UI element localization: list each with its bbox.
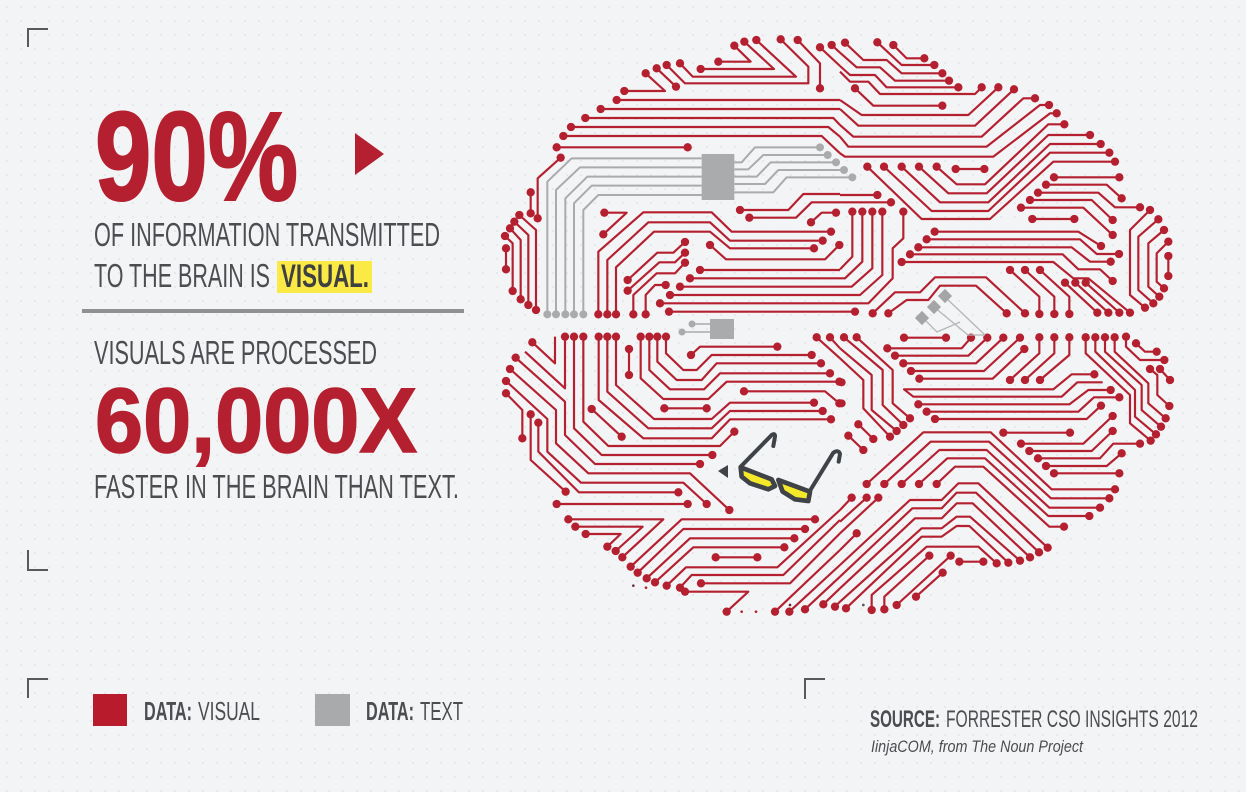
corner bracket: bottom left	[28, 550, 48, 570]
brain: small gray chip, centre	[678, 319, 734, 339]
legend: data visual	[93, 694, 260, 726]
brain: lower right traces	[838, 337, 1170, 610]
text: visuals are processed: VISUALS ARE PROCESSED	[94, 334, 377, 371]
text: faster in the brain: FASTER IN THE BRAIN THAN TEXT.	[94, 468, 459, 505]
icon: red arrow	[355, 133, 384, 175]
divider	[82, 309, 464, 313]
icon: glasses pointer triangle	[718, 465, 728, 478]
legend: data visual: VISUAL	[198, 696, 260, 726]
brain: upper right traces	[840, 42, 1168, 314]
legend: data text: TEXT	[420, 696, 463, 726]
headline stat: 60,000X: 60,000X	[95, 370, 417, 472]
brain: gray text-data chip, upper left	[547, 147, 852, 314]
corner bracket: top left	[28, 29, 48, 47]
source line: SOURCE:	[870, 706, 940, 733]
legend: data text	[315, 694, 463, 726]
icon: glasses	[741, 434, 840, 501]
brain: upper left traces	[505, 39, 840, 314]
image credit: IinjaCOM, from The Noun Project	[871, 737, 1084, 756]
headline stat: 90%: 90%	[95, 86, 298, 227]
source line	[870, 706, 1198, 733]
legend: data visual: DATA:	[144, 696, 192, 726]
text: information transmitted line 1: OF INFORMATION TRANSMITTED	[94, 216, 440, 253]
text: information transmitted line 2: TO THE BRAIN IS	[94, 257, 270, 294]
brain: gray diamond chips, right	[915, 289, 985, 335]
brain: lower left traces	[506, 337, 840, 613]
corner bracket: legend	[28, 679, 48, 698]
legend: data text: DATA:	[366, 696, 414, 726]
corner bracket: source	[805, 679, 825, 699]
highlight: visual: VISUAL.	[281, 258, 369, 294]
highlight: visual	[277, 258, 372, 294]
brain circuit illustration	[505, 39, 1170, 613]
